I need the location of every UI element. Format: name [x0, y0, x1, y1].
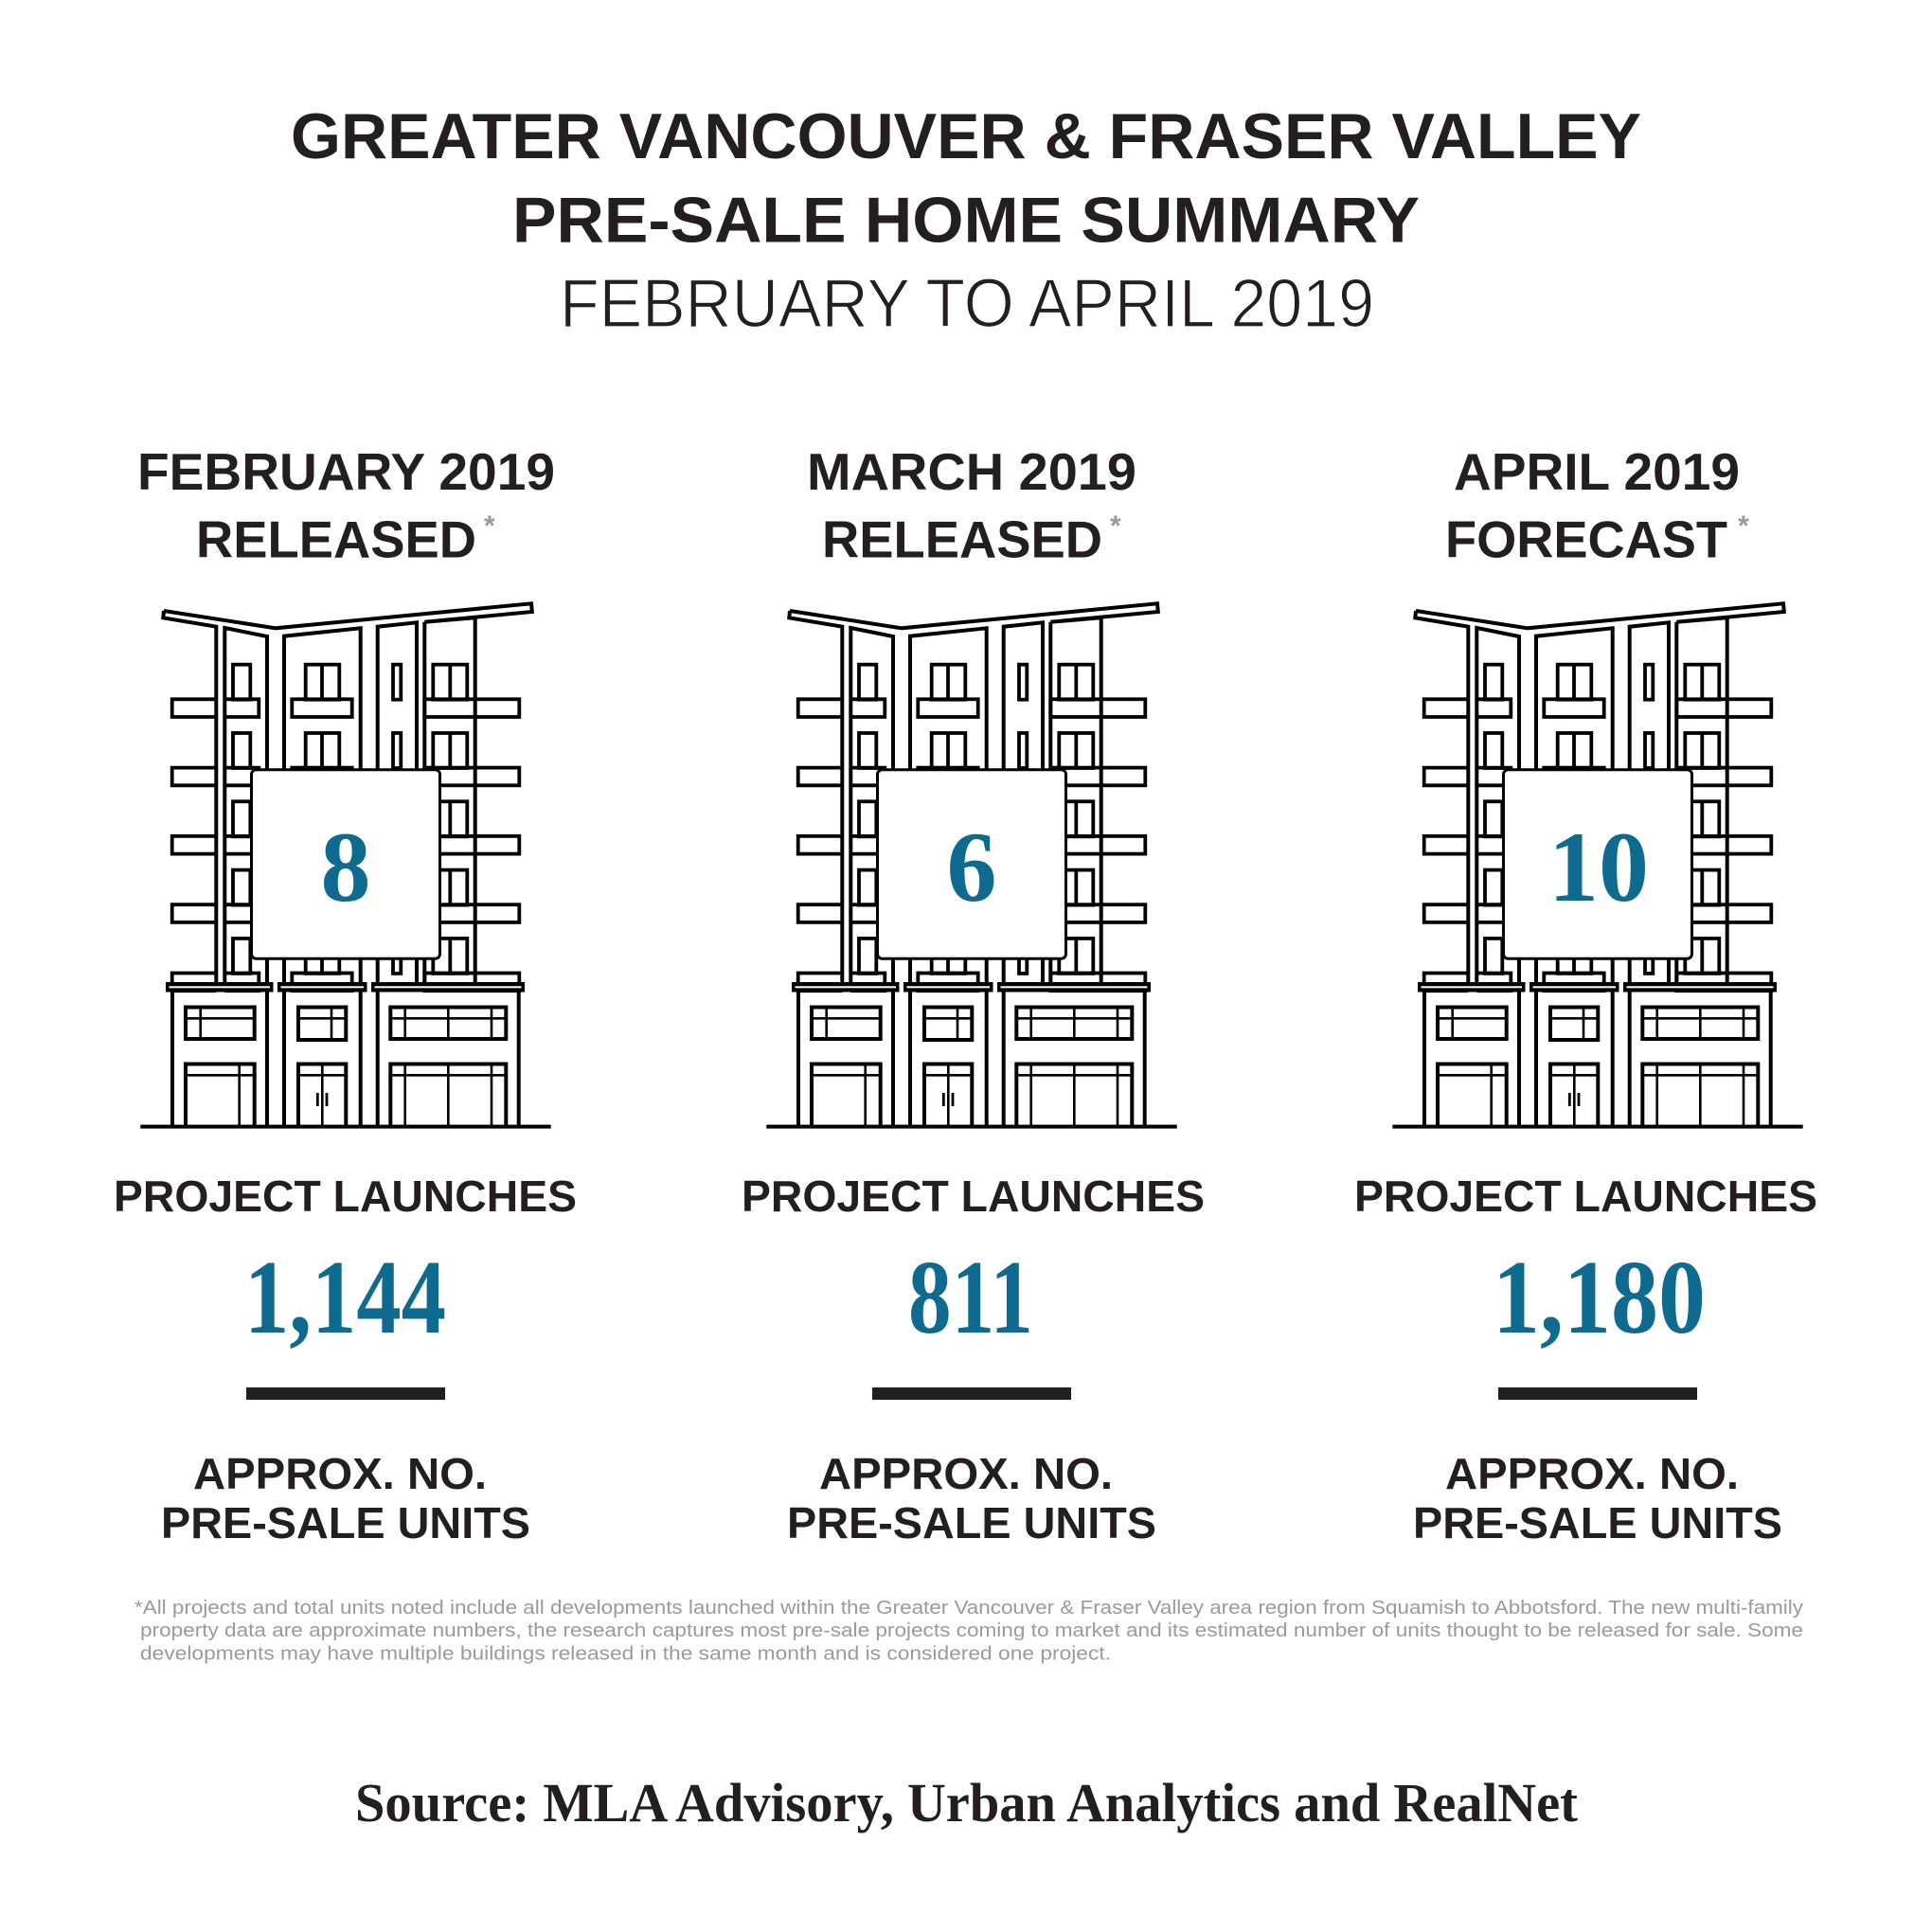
label: project launches: PROJECT LAUNCHES [114, 1172, 577, 1221]
units number: 811 [908, 1240, 1033, 1356]
label: project launches: PROJECT LAUNCHES [1354, 1172, 1817, 1221]
heading: February released: FEBRUARY 2019 [137, 442, 555, 501]
divider bar [1498, 1387, 1697, 1400]
heading: March released: MARCH 2019 [807, 442, 1136, 501]
label: approx units: PRE-SALE UNITS [787, 1498, 1156, 1547]
footnote: *All projects and total units noted include all developments launched within the Greater Vancouver & Fraser Valley area region from Squamish to Abbotsford. The new multi-family [134, 1598, 1803, 1619]
heading: April forecast: APRIL 2019 [1454, 442, 1740, 501]
label: approx units [1413, 1449, 1782, 1547]
label: approx units: APPROX. NO. [819, 1449, 1113, 1498]
label: approx units [787, 1449, 1156, 1547]
heading: April forecast: FORECAST [1445, 510, 1727, 568]
heading: February released [137, 442, 555, 568]
heading: February released: * [484, 510, 495, 542]
title: FEBRUARY TO APRIL 2019 [560, 266, 1374, 342]
icon: building [140, 603, 551, 1129]
heading: March released: * [1110, 510, 1121, 542]
project launches count: 10 [1548, 812, 1649, 922]
heading: April forecast: * [1738, 510, 1749, 542]
panel: March 2019 [742, 442, 1205, 1547]
heading: February released: RELEASED [196, 510, 476, 568]
label: approx units: APPROX. NO. [193, 1449, 487, 1498]
project launches count: 6 [947, 812, 996, 922]
heading: April forecast [1445, 442, 1749, 568]
label: approx units: PRE-SALE UNITS [1413, 1498, 1782, 1547]
project launches count: 8 [320, 812, 371, 922]
label: approx units [161, 1449, 530, 1547]
title: PRE-SALE HOME SUMMARY [512, 184, 1420, 256]
label: approx units: PRE-SALE UNITS [161, 1498, 530, 1547]
divider bar [872, 1387, 1071, 1400]
divider bar [246, 1387, 445, 1400]
heading: March released [807, 442, 1136, 568]
panel: February 2019 [114, 442, 577, 1547]
source line: Source: MLA Advisory, Urban Analytics and RealNet [355, 1772, 1579, 1834]
icon: building [766, 603, 1177, 1129]
units number: 1,180 [1493, 1240, 1706, 1356]
panel: April 2019 [1354, 442, 1817, 1547]
units number: 1,144 [244, 1240, 446, 1356]
heading: March released: RELEASED [822, 510, 1102, 568]
label: approx units: APPROX. NO. [1445, 1449, 1739, 1498]
footnote [134, 1598, 1803, 1665]
footnote: property data are approximate numbers, the research captures most pre-sale projects coming to market and its estimated number of units thought to be released for sale. Some [140, 1620, 1803, 1641]
label: project launches: PROJECT LAUNCHES [742, 1172, 1205, 1221]
footnote: developments may have multiple buildings released in the same month and is considered one project. [140, 1644, 1111, 1665]
title [291, 100, 1641, 342]
title: GREATER VANCOUVER & FRASER VALLEY [291, 100, 1641, 172]
icon: building [1392, 603, 1803, 1129]
